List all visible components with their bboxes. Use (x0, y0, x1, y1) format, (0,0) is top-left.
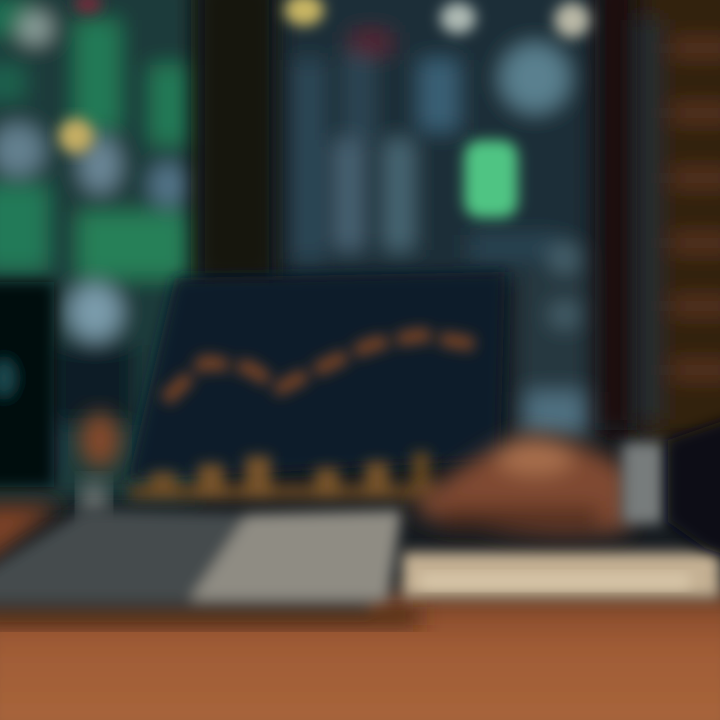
panel: dark window mullions (198, 0, 637, 430)
icon: pale stem below object (82, 482, 106, 518)
icon: orange object left of laptop (80, 412, 120, 468)
icon: hand on laptop (415, 434, 630, 535)
panel: laptop base (0, 510, 402, 612)
icon: top bokeh lights (74, 0, 590, 38)
panel: black left edge (0, 282, 54, 487)
icon: yellow bokeh light left (58, 118, 94, 154)
icon: dark jacket sleeve (668, 415, 720, 560)
panel: white paper on table (402, 552, 720, 598)
line chart (165, 335, 478, 400)
panel: centre blue monitor (282, 0, 590, 440)
panel: wooden table (0, 505, 720, 720)
panel: right brick wall (636, 0, 720, 440)
panel: left green monitor (0, 0, 195, 500)
panel: paper bright edge (420, 574, 690, 588)
icon: shirt cuff (622, 442, 664, 524)
bar strip (130, 452, 440, 500)
chart: laptop screen with orange line and bars (128, 272, 505, 500)
icon: bright green tile (464, 140, 518, 218)
